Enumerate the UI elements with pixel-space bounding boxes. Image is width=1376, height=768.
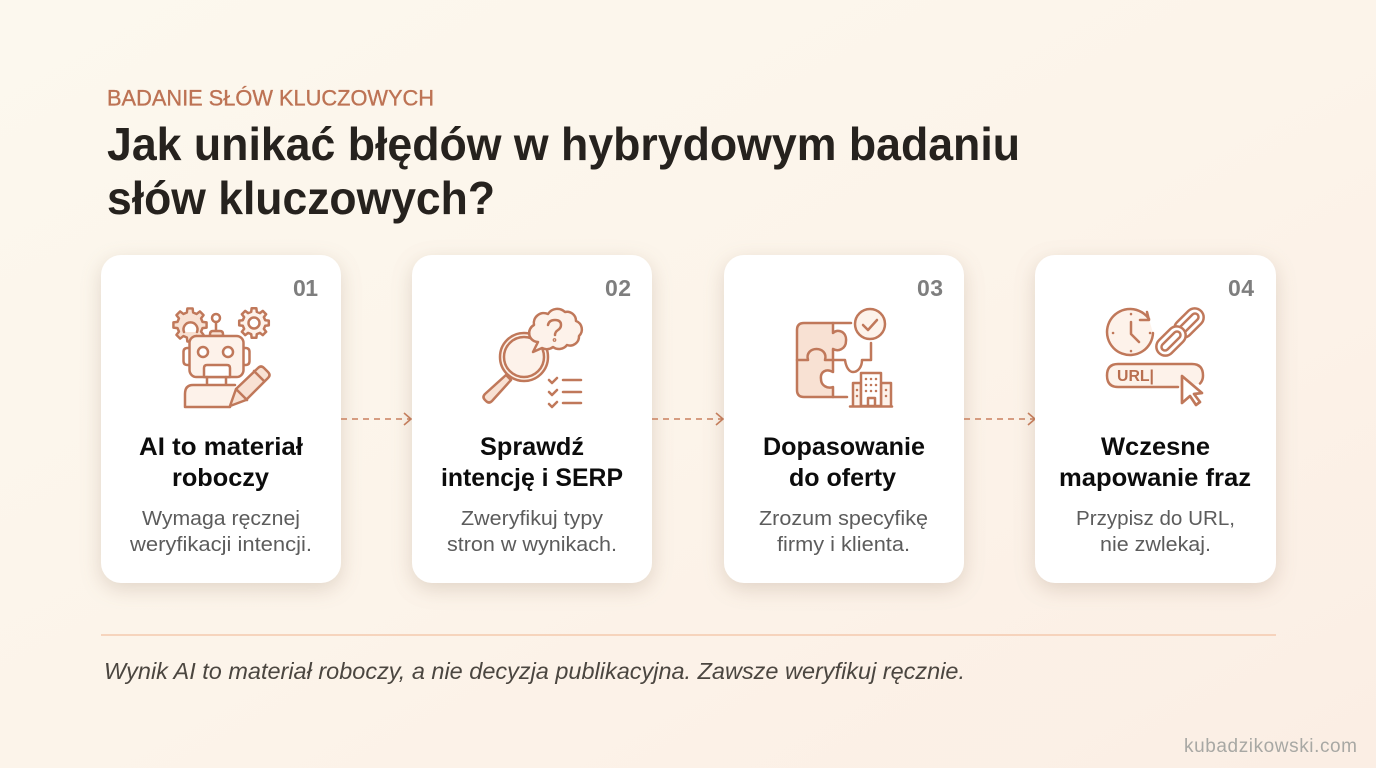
card description: stron w wynikach. (447, 534, 617, 556)
arrow: 03 to 04 (964, 413, 1035, 425)
title: słów kluczowych? (107, 172, 495, 224)
card description: Wymaga ręcznej (142, 508, 300, 530)
eyebrow heading: BADANIE SŁÓW KLUCZOWYCH (107, 86, 434, 110)
card description (129, 508, 312, 556)
card description: weryfikacji intencji. (129, 534, 312, 556)
card title (1059, 433, 1251, 492)
panel: card 02 (412, 255, 652, 583)
card description (759, 508, 928, 556)
step number 03: 03 (917, 275, 943, 301)
icon: magnifier with question cloud and checklist (484, 309, 582, 407)
watermark: kubadzikowski.com (1184, 736, 1357, 757)
card title: roboczy (172, 464, 269, 492)
panel: card 04 (1035, 255, 1276, 583)
card title: Wczesne (1101, 433, 1210, 461)
panel: card 03 (724, 255, 964, 583)
step number 04: 04 (1228, 275, 1254, 301)
card description (1076, 508, 1235, 556)
footer note: Wynik AI to materiał roboczy, a nie decyzja publikacyjna. Zawsze weryfikuj ręcznie. (104, 658, 965, 684)
card description: nie zwlekaj. (1100, 534, 1211, 556)
step number 01: 01 (293, 275, 318, 301)
card title: Sprawdź (480, 433, 584, 461)
card title: do oferty (789, 464, 896, 492)
card description: Zweryfikuj typy (461, 508, 603, 530)
card description: Zrozum specyfikę (759, 508, 928, 530)
arrow: 02 to 03 (652, 413, 723, 425)
card title (139, 433, 303, 492)
panel: card 01 (101, 255, 341, 583)
title: Jak unikać błędów w hybrydowym badaniu (107, 118, 1020, 170)
card title: AI to materiał (139, 433, 303, 461)
card title: intencję i SERP (441, 464, 623, 492)
icon: clock, chain link, URL bar and cursor (1107, 305, 1207, 405)
URL label: URL| (1117, 368, 1154, 385)
card title (763, 433, 925, 492)
arrow: 01 to 02 (341, 413, 411, 425)
card description: Przypisz do URL, (1076, 508, 1235, 530)
card description: firmy i klienta. (777, 534, 910, 556)
icon: puzzle with check and building (797, 309, 892, 406)
card title (441, 433, 623, 492)
icon: robot with gears and pencil (173, 308, 270, 407)
card title: Dopasowanie (763, 433, 925, 461)
card description (447, 508, 617, 556)
title (107, 118, 1020, 224)
step number 02: 02 (605, 275, 631, 301)
card title: mapowanie fraz (1059, 464, 1251, 492)
